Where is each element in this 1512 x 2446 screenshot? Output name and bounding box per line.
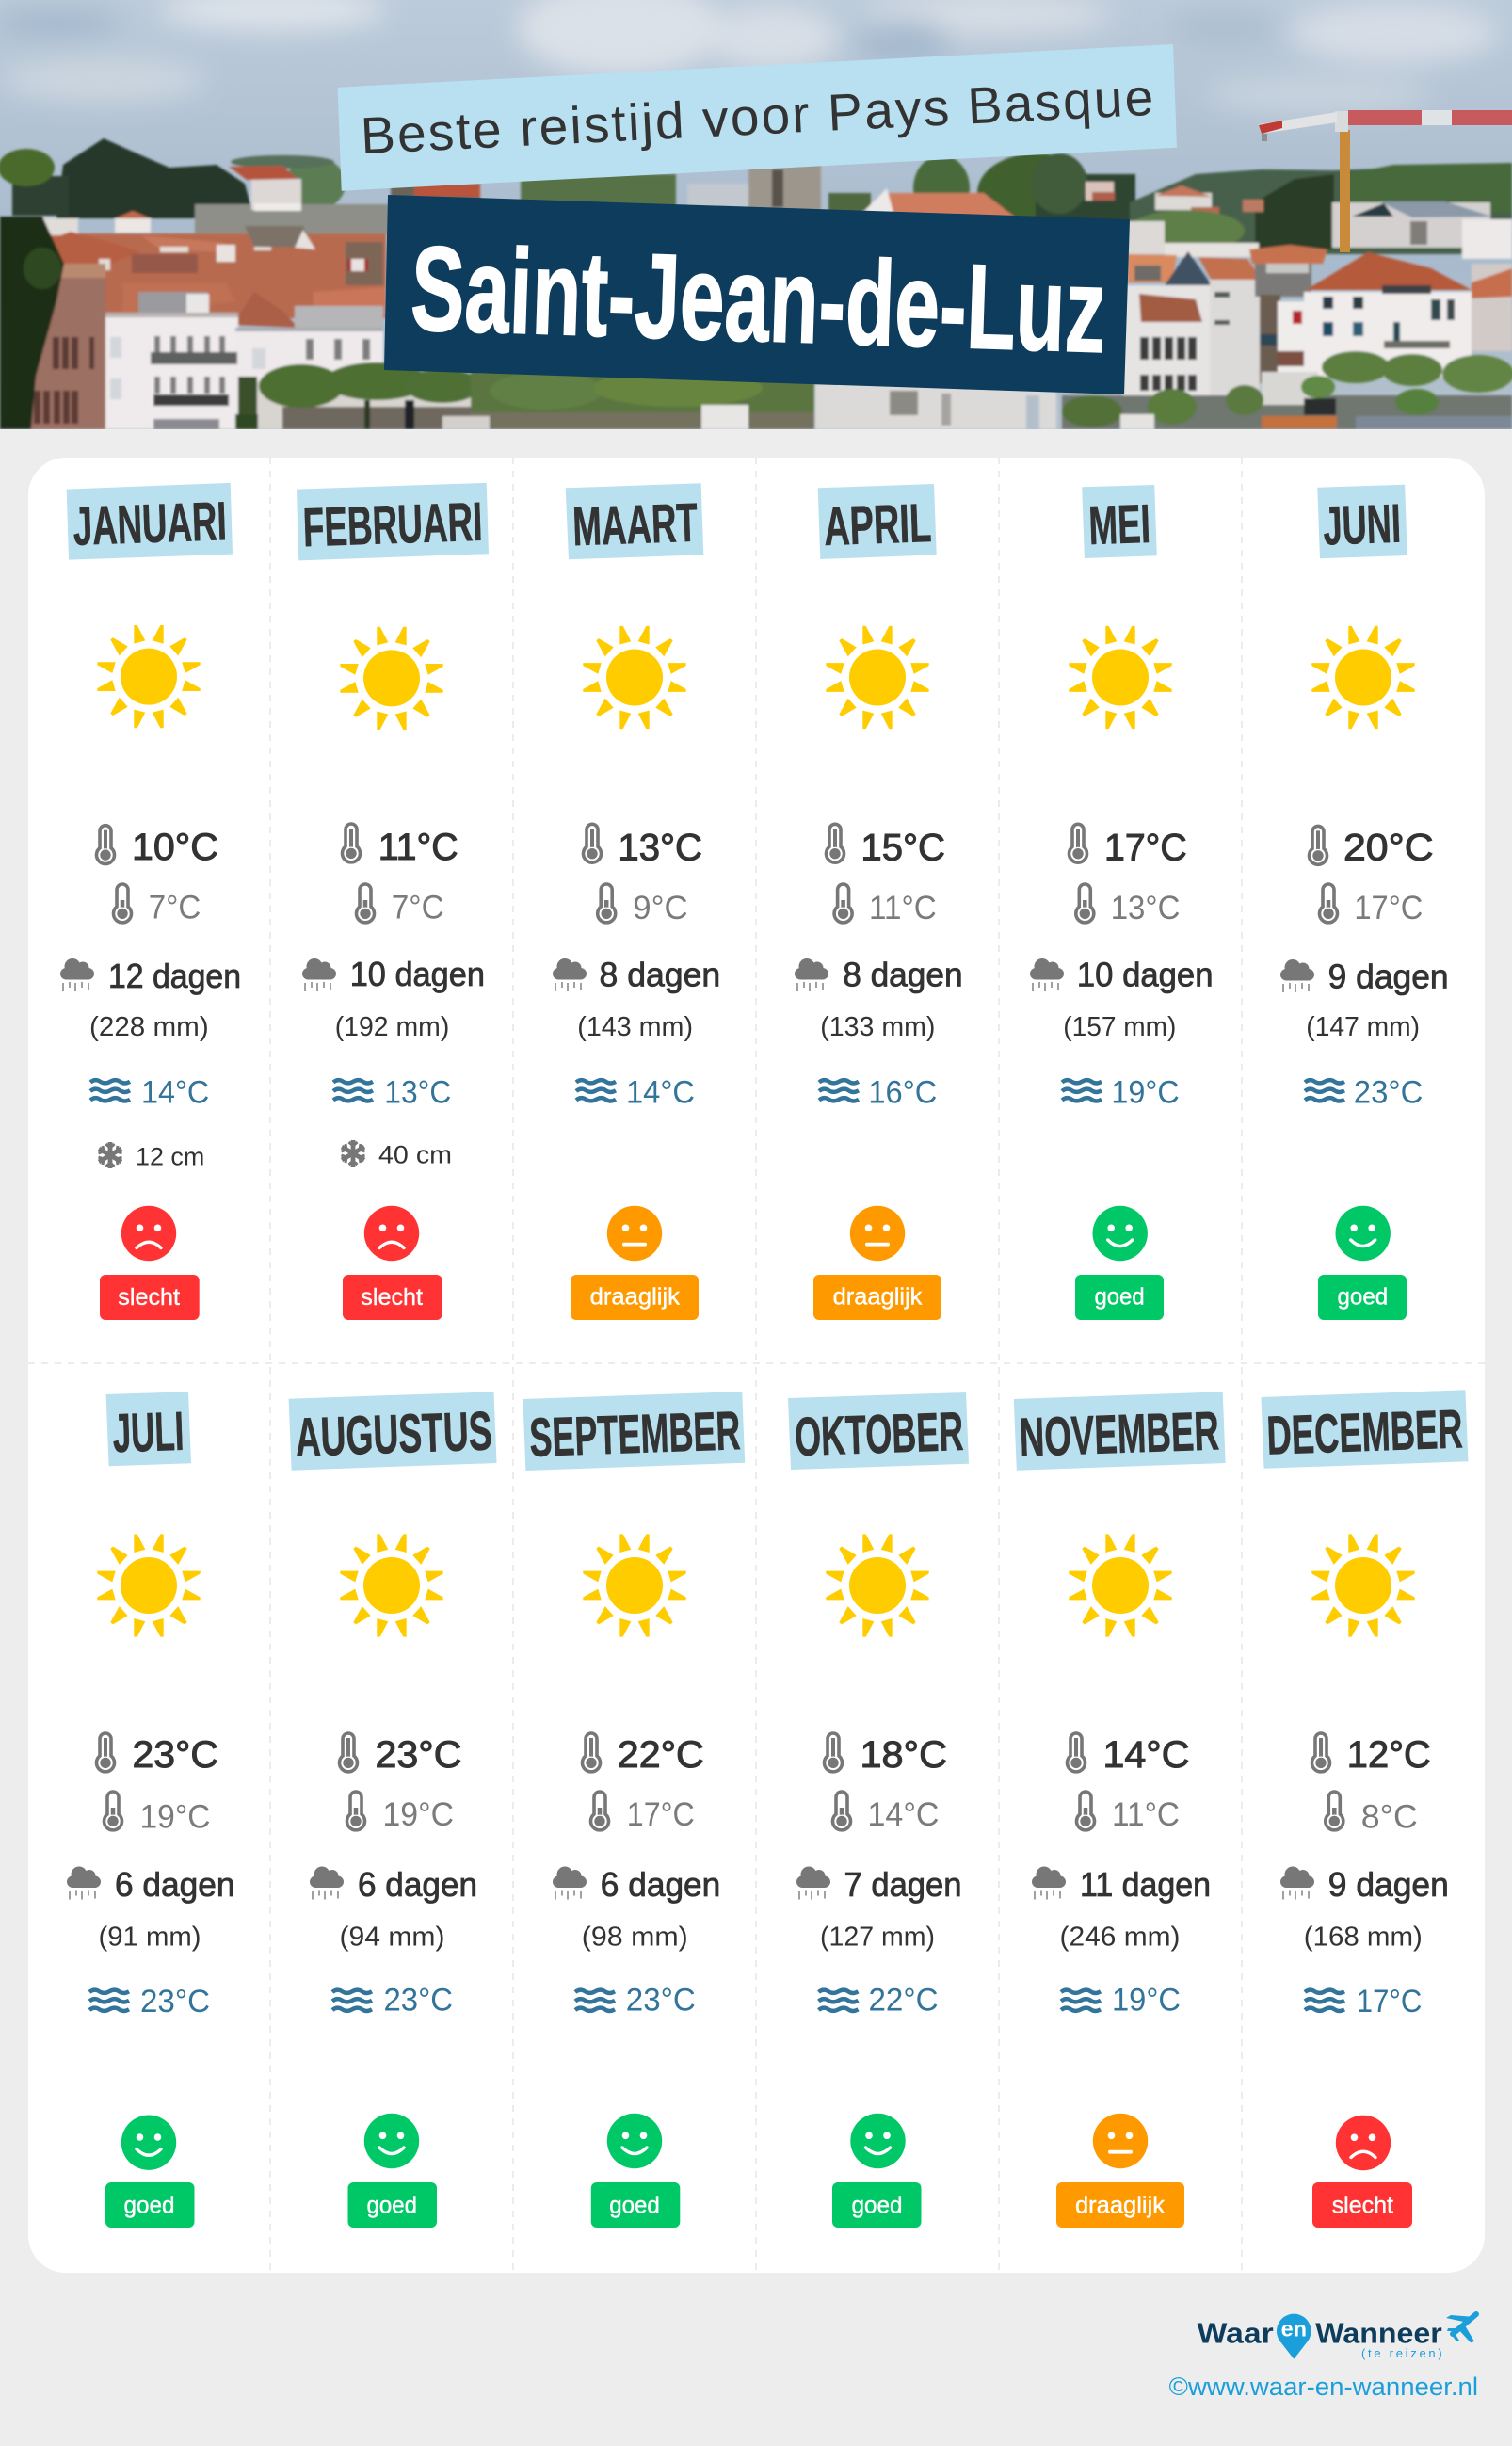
sea temperature: 13°C <box>384 1075 451 1111</box>
icon: neutral face <box>1093 2114 1148 2168</box>
low temperature: 17°C <box>627 1796 695 1833</box>
high temperature: 11°C <box>378 827 458 868</box>
icon: thermometer high <box>1070 824 1086 862</box>
low temperature: 7°C <box>149 890 201 926</box>
month label <box>566 483 703 559</box>
sea temperature: 23°C <box>140 1984 210 2020</box>
sea temperature: 23°C <box>626 1983 696 2019</box>
month: maart <box>553 483 720 1320</box>
high temperature: 18°C <box>861 1734 947 1776</box>
low temperature: 13°C <box>1111 890 1180 926</box>
rain days: 6 dagen <box>358 1865 477 1904</box>
month label <box>297 483 489 560</box>
icon: waves <box>575 1990 615 2011</box>
rain days: 6 dagen <box>601 1865 720 1904</box>
icon: sun <box>826 1534 929 1637</box>
left tree strip <box>0 217 64 429</box>
icon: sun <box>340 1534 443 1637</box>
month: juli <box>67 1392 235 2228</box>
logo: Waar en Wanneer: Wanneer <box>1315 2316 1442 2349</box>
rainfall: (192 mm) <box>335 1012 449 1042</box>
rainfall: (98 mm) <box>582 1922 688 1952</box>
icon: waves <box>89 1990 129 2011</box>
icon: sun <box>1311 626 1415 729</box>
rain days: 8 dagen <box>843 955 963 994</box>
month label <box>818 484 937 559</box>
high temperature: 20°C <box>1343 827 1434 868</box>
rating badge: goed <box>609 2192 660 2218</box>
rainfall: (94 mm) <box>339 1922 444 1952</box>
right trees and harbour <box>1062 395 1512 429</box>
icon: sun <box>1069 1534 1172 1637</box>
rain days: 9 dagen <box>1328 1865 1449 1904</box>
rating badge: goed <box>851 2192 902 2218</box>
sea temperature: 16°C <box>868 1075 937 1111</box>
rain days: 8 dagen <box>599 955 720 994</box>
rating badge <box>100 1275 200 1320</box>
icon: thermometer low <box>598 884 616 923</box>
month label: SEPTEMBER <box>528 1400 741 1469</box>
sea temperature: 22°C <box>868 1983 938 2019</box>
icon: snowflake <box>98 1142 122 1168</box>
low temperature: 9°C <box>633 890 688 926</box>
icon: thermometer high <box>582 1733 601 1772</box>
icon: rain cloud <box>310 1866 344 1900</box>
icon: rain cloud <box>1030 958 1064 991</box>
month: april <box>795 484 963 1320</box>
icon: rain cloud <box>302 958 336 991</box>
month: februari <box>297 483 489 1320</box>
icon: waves <box>1305 1990 1344 2011</box>
month label: NOVEMBER <box>1019 1400 1220 1469</box>
logo: Waar en Wanneer <box>1198 2314 1476 2360</box>
low temperature: 14°C <box>868 1796 940 1833</box>
rating badge <box>832 2182 921 2228</box>
rainfall: (91 mm) <box>98 1922 201 1952</box>
month: november <box>1014 1392 1226 2228</box>
rainfall: (168 mm) <box>1304 1922 1423 1952</box>
icon: thermometer high <box>343 824 360 862</box>
icon: waves <box>332 1990 372 2011</box>
title banner: Beste reistijd voor Pays Basque <box>338 44 1177 191</box>
icon: snowflake <box>341 1140 365 1167</box>
icon: thermometer high <box>1068 1733 1085 1772</box>
rating badge <box>1075 1275 1164 1320</box>
rating badge: draaglijk <box>1075 2192 1166 2218</box>
header photo: Saint-Jean-de-Luz townscape <box>0 0 1512 429</box>
rainfall: (147 mm) <box>1306 1012 1420 1042</box>
icon: airplane <box>1446 2314 1476 2342</box>
icon: thermometer high <box>96 826 115 864</box>
icon: waves <box>1305 1080 1344 1101</box>
rating badge <box>348 2182 437 2228</box>
icon: thermometer low <box>104 1792 122 1830</box>
icon: rain cloud <box>67 1866 101 1900</box>
icon: thermometer high <box>1309 826 1327 864</box>
high temperature: 22°C <box>618 1734 704 1776</box>
rainfall: (143 mm) <box>577 1012 693 1042</box>
icon: happy face <box>364 2114 419 2168</box>
icon: rain cloud <box>553 958 587 991</box>
month label: MAART <box>571 492 699 557</box>
rating badge: goed <box>367 2192 417 2218</box>
sea temperature: 14°C <box>626 1075 695 1111</box>
sea temperature: 19°C <box>1111 1075 1180 1111</box>
icon: map pin: en <box>1281 2317 1307 2341</box>
month label <box>289 1392 497 1471</box>
low temperature: 11°C <box>869 890 937 926</box>
rain days: 9 dagen <box>1328 957 1449 995</box>
low temperature: 8°C <box>1361 1798 1418 1835</box>
rain days: 7 dagen <box>844 1865 962 1904</box>
icon: sun <box>583 626 686 729</box>
title banner: Saint-Jean-de-Luz <box>384 195 1130 394</box>
icon: sun <box>340 627 443 730</box>
rain days: 10 dagen <box>350 955 485 993</box>
rating badge: draaglijk <box>590 1284 681 1311</box>
crane <box>1259 110 1512 252</box>
high temperature: 13°C <box>618 827 702 868</box>
icon: happy face <box>121 2115 176 2170</box>
icon: thermometer low <box>1076 884 1094 923</box>
left buildings <box>19 276 105 429</box>
month: oktober <box>788 1392 969 2228</box>
month label <box>1317 485 1407 558</box>
icon: rain cloud <box>60 958 94 991</box>
month label: OKTOBER <box>794 1401 964 1468</box>
icon: happy face <box>850 2114 906 2168</box>
icon: waves <box>90 1080 130 1101</box>
icon: thermometer low <box>346 1792 365 1830</box>
icon: sad face <box>121 1206 176 1261</box>
month label <box>788 1392 969 1470</box>
icon: thermometer low <box>832 1792 851 1830</box>
title banner: Beste reistijd voor Pays Basque: Beste reistijd voor Pays Basque <box>360 68 1155 165</box>
right hill <box>1036 174 1135 221</box>
icon: sun <box>826 626 929 729</box>
icon: thermometer high <box>1312 1733 1329 1772</box>
icon: thermometer low <box>113 884 132 923</box>
icon: rain cloud <box>795 958 828 991</box>
icon: thermometer low <box>591 1792 608 1830</box>
left roofs <box>31 233 386 318</box>
high temperature: 23°C <box>132 1734 218 1776</box>
icon: waves <box>1062 1080 1102 1101</box>
icon: rain cloud <box>553 1866 587 1900</box>
low temperature: 7°C <box>392 890 444 926</box>
high temperature: 15°C <box>861 827 945 868</box>
icon: rain cloud <box>796 1866 830 1900</box>
low temperature: 17°C <box>1354 890 1423 926</box>
high temperature: 12°C <box>1347 1734 1431 1776</box>
month: augustus <box>289 1392 497 2228</box>
month: juni <box>1280 485 1449 1320</box>
high temperature: 17°C <box>1104 827 1187 868</box>
icon: thermometer high <box>584 824 601 862</box>
icon: thermometer high <box>96 1733 115 1772</box>
icon: thermometer low <box>834 884 852 923</box>
icon: sad face <box>1336 2116 1391 2170</box>
logo: Waar en Wanneer: (te reizen) <box>1361 2346 1442 2360</box>
icon: rain cloud <box>1280 959 1314 992</box>
sea temperature: 23°C <box>384 1983 453 2019</box>
rating badge <box>813 1275 941 1320</box>
rating badge <box>571 1275 699 1320</box>
month label: JUNI <box>1322 493 1402 556</box>
icon: sun <box>1069 626 1172 729</box>
left hill <box>56 138 254 218</box>
rain days: 11 dagen <box>1080 1865 1211 1904</box>
rating badge: goed <box>124 2192 175 2218</box>
low temperature: 19°C <box>139 1798 211 1835</box>
month: september <box>523 1392 745 2228</box>
rating badge <box>1318 1275 1407 1320</box>
rating badge <box>1312 2182 1412 2228</box>
rainfall: (228 mm) <box>89 1012 209 1042</box>
icon: happy face <box>1092 1206 1148 1261</box>
icon: thermometer high <box>825 1733 842 1772</box>
icon: sun <box>97 1534 201 1637</box>
month label <box>106 1392 191 1466</box>
rating badge: slecht <box>118 1284 180 1311</box>
rainfall: (127 mm) <box>820 1922 935 1952</box>
icon: waves <box>333 1080 373 1101</box>
low temperature: 11°C <box>1112 1796 1180 1833</box>
sea temperature: 19°C <box>1112 1983 1181 2019</box>
month label <box>1014 1392 1226 1471</box>
rainfall: (157 mm) <box>1063 1012 1176 1042</box>
centre skyline <box>391 184 480 207</box>
snow: 40 cm <box>378 1141 452 1169</box>
snow: 12 cm <box>136 1143 204 1171</box>
month: januari <box>60 483 241 1320</box>
icon: sun <box>583 1534 686 1637</box>
icon: neutral face <box>850 1206 905 1261</box>
month: mei <box>1030 485 1213 1320</box>
icon: neutral face <box>607 1206 662 1261</box>
rating badge <box>105 2182 194 2228</box>
icon: waves <box>1061 1990 1101 2011</box>
icon: thermometer high <box>339 1733 358 1772</box>
month label <box>523 1392 745 1471</box>
month: december <box>1262 1390 1468 2228</box>
month label: APRIL <box>823 492 932 557</box>
month label: JANUARI <box>72 491 228 557</box>
month label: JULI <box>112 1401 185 1464</box>
icon: thermometer low <box>356 884 375 923</box>
sea temperature: 23°C <box>1354 1075 1423 1111</box>
rating badge: slecht <box>361 1284 423 1311</box>
month label <box>67 483 233 560</box>
street trees <box>238 381 521 429</box>
title banner: Saint-Jean-de-Luz: Saint-Jean-de-Luz <box>409 221 1108 378</box>
icon: thermometer low <box>1326 1792 1343 1830</box>
sea temperature: 14°C <box>141 1075 209 1111</box>
icon: sad face <box>364 1206 419 1261</box>
rainfall: (133 mm) <box>820 1012 935 1042</box>
rating badge: goed <box>1094 1284 1145 1311</box>
rain days: 6 dagen <box>115 1865 235 1904</box>
high temperature: 14°C <box>1103 1734 1190 1776</box>
month label: FEBRUARI <box>302 491 483 558</box>
month label <box>1082 485 1157 558</box>
rain days: 12 dagen <box>108 957 241 995</box>
rainfall: (246 mm) <box>1060 1922 1181 1952</box>
high temperature: 10°C <box>132 827 218 868</box>
icon: sun <box>1311 1534 1415 1637</box>
month label: AUGUSTUS <box>295 1400 493 1469</box>
low temperature: 19°C <box>382 1796 454 1833</box>
icon: thermometer low <box>1077 1792 1094 1830</box>
rating badge: draaglijk <box>833 1284 923 1311</box>
panel: months card <box>28 458 1485 2273</box>
logo: Waar en Wanneer: Waar <box>1198 2316 1274 2349</box>
icon: thermometer high <box>827 824 844 862</box>
website credit: ©www.waar-en-wanneer.nl <box>1169 2373 1478 2401</box>
rain days: 10 dagen <box>1077 955 1213 994</box>
rating badge <box>591 2182 680 2228</box>
rating badge: slecht <box>1332 2192 1393 2218</box>
icon: waves <box>819 1990 859 2011</box>
high temperature: 23°C <box>375 1734 461 1776</box>
rating badge <box>343 1275 442 1320</box>
icon: happy face <box>607 2114 662 2168</box>
rating badge: goed <box>1337 1284 1388 1311</box>
icon: waves <box>576 1080 616 1101</box>
icon: rain cloud <box>1032 1866 1066 1900</box>
sea temperature: 17°C <box>1357 1984 1422 2020</box>
icon: thermometer low <box>1320 884 1337 923</box>
icon: waves <box>819 1080 859 1101</box>
rating badge <box>1056 2182 1184 2228</box>
icon: sun <box>97 625 201 728</box>
icon: rain cloud <box>1280 1866 1314 1900</box>
month label: MEI <box>1087 493 1151 556</box>
icon: map pin <box>1277 2314 1311 2359</box>
icon: happy face <box>1335 1206 1391 1261</box>
